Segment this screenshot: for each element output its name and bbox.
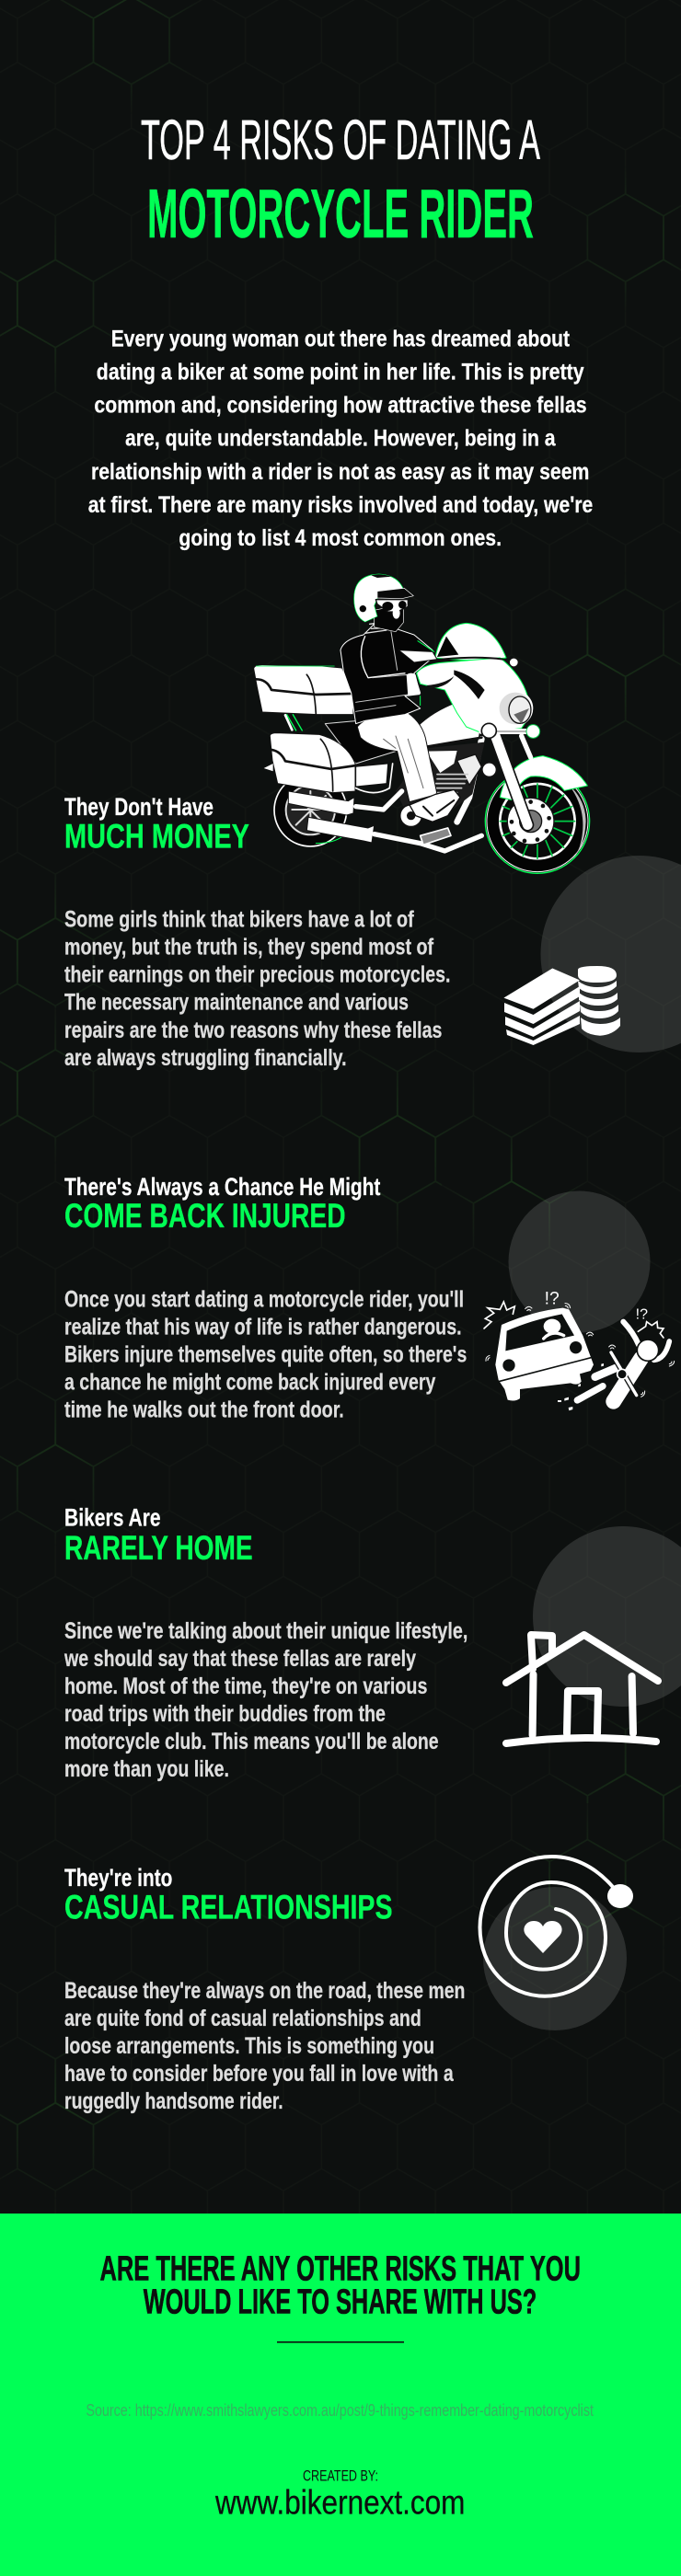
section 2 body text: Once you start dating a motorcycle rider, you'll [64, 1286, 464, 1312]
section 4 body text: Because they're always on the road, these men [64, 1978, 465, 2004]
section 2 heading [64, 1173, 380, 1235]
section 1 body text: repairs are the two reasons why these fellas [64, 1018, 442, 1043]
section 2 body text: realize that his way of life is rather dangerous. [64, 1314, 462, 1340]
credit: www.bikernext.com [214, 2484, 465, 2522]
saddlebag [264, 733, 393, 793]
vibration marks [486, 1304, 675, 1397]
car [495, 1308, 594, 1401]
title [141, 109, 540, 252]
section 1 body text: their earnings on their precious motorcycles. [64, 962, 450, 988]
section 3 body text: road trips with their buddies from the [64, 1701, 386, 1727]
section 3 body text: motorcycle club. This means you'll be alone [64, 1729, 439, 1754]
section 4 body text: are quite fond of casual relationships and [64, 2006, 421, 2031]
intro text: common and, considering how attractive these fellas [94, 393, 587, 419]
decorative circle: section 3 [533, 1526, 681, 1707]
intro text: going to list 4 most common ones. [179, 525, 502, 551]
section 3 heading: RARELY HOME [64, 1529, 253, 1567]
intro text: at first. There are many risks involved and today, we're [88, 492, 593, 518]
rear wheel [274, 774, 347, 846]
question and exclamation marks: !? [545, 1289, 560, 1308]
rider head and helmet [354, 574, 413, 632]
section 1 body text: money, but the truth is, they spend most of [64, 935, 434, 960]
footer call to action [99, 2250, 581, 2322]
section 2 body text: Bikers injure themselves quite often, so there's [64, 1341, 467, 1367]
section 3 body text [63, 1618, 467, 1782]
seat and frame [325, 720, 396, 764]
intro text [88, 326, 593, 551]
intro text: relationship with a rider is not as easy as it may seem [91, 459, 589, 485]
headlight [481, 692, 540, 738]
icon: heart spiral [480, 1857, 633, 1996]
section 2 body text [64, 1286, 467, 1422]
intro text: are, quite understandable. However, being in a [125, 426, 557, 452]
section 2 heading: COME BACK INJURED [64, 1197, 346, 1235]
decorative circle: section 1 [541, 856, 681, 1052]
rider legs and boot [357, 713, 460, 822]
impact bursts [484, 1302, 664, 1338]
credit [214, 2467, 465, 2522]
motorcycle and fallen rider [577, 1322, 669, 1401]
section 2 body text: time he walks out the front door. [64, 1397, 344, 1422]
section 3 body text: we should say that these fellas are rarely [63, 1646, 416, 1672]
section 3 body text: more than you like. [64, 1756, 229, 1782]
front wheel [485, 769, 590, 873]
icon: money stacks [503, 966, 620, 1045]
engine [396, 742, 497, 816]
tank and fairing [417, 623, 531, 747]
front fender [500, 756, 587, 800]
section 4 heading [64, 1864, 393, 1926]
section 3 heading: Bikers Are [64, 1503, 161, 1531]
section 4 heading: They're into [64, 1864, 172, 1892]
intro text: Every young woman out there has dreamed about [111, 326, 571, 351]
section 3 body text: Since we're talking about their unique lifestyle, [64, 1618, 467, 1644]
icon: house [506, 1635, 658, 1743]
section 1 heading [64, 793, 249, 856]
section 1 heading: They Don't Have [64, 793, 214, 821]
section 1 body text [64, 906, 450, 1071]
section 2 body text: a chance he might come back injured every [64, 1369, 435, 1395]
illustration: motorcycle rider [254, 574, 590, 873]
debris [558, 1363, 604, 1410]
rider jacket [340, 621, 437, 724]
section 3 body text: home. Most of the time, they're on various [64, 1673, 427, 1699]
section 4 heading: CASUAL RELATIONSHIPS [64, 1888, 393, 1926]
exhaust pipes [288, 791, 481, 851]
icon: car and motorcycle crash [484, 1289, 675, 1410]
section 2 heading: There's Always a Chance He Might [64, 1173, 380, 1201]
fork [457, 736, 531, 825]
section 4 body text: loose arrangements. This is something you [64, 2033, 434, 2059]
intro text: dating a biker at some point in her life. This is pretty [97, 359, 584, 385]
question and exclamation marks: !? [636, 1306, 648, 1322]
section 1 heading: MUCH MONEY [64, 818, 249, 856]
decorative circle: section 4 [483, 1887, 627, 2030]
section 3 heading [64, 1503, 253, 1567]
section 4 body text: have to consider before you fall in love with a [64, 2061, 455, 2087]
footer panel [0, 2214, 681, 2576]
top case [254, 665, 353, 715]
question and exclamation marks [545, 1289, 648, 1322]
credit: CREATED BY: [303, 2467, 378, 2485]
section 1 body text: are always struggling financially. [64, 1045, 347, 1071]
section 1 body text: The necessary maintenance and various [64, 990, 409, 1016]
section 1 body text: Some girls think that bikers have a lot of [64, 906, 414, 932]
section 4 body text: ruggedly handsome rider. [64, 2088, 283, 2114]
section 4 body text [64, 1978, 465, 2114]
decorative circle: section 2 [508, 1190, 650, 1332]
